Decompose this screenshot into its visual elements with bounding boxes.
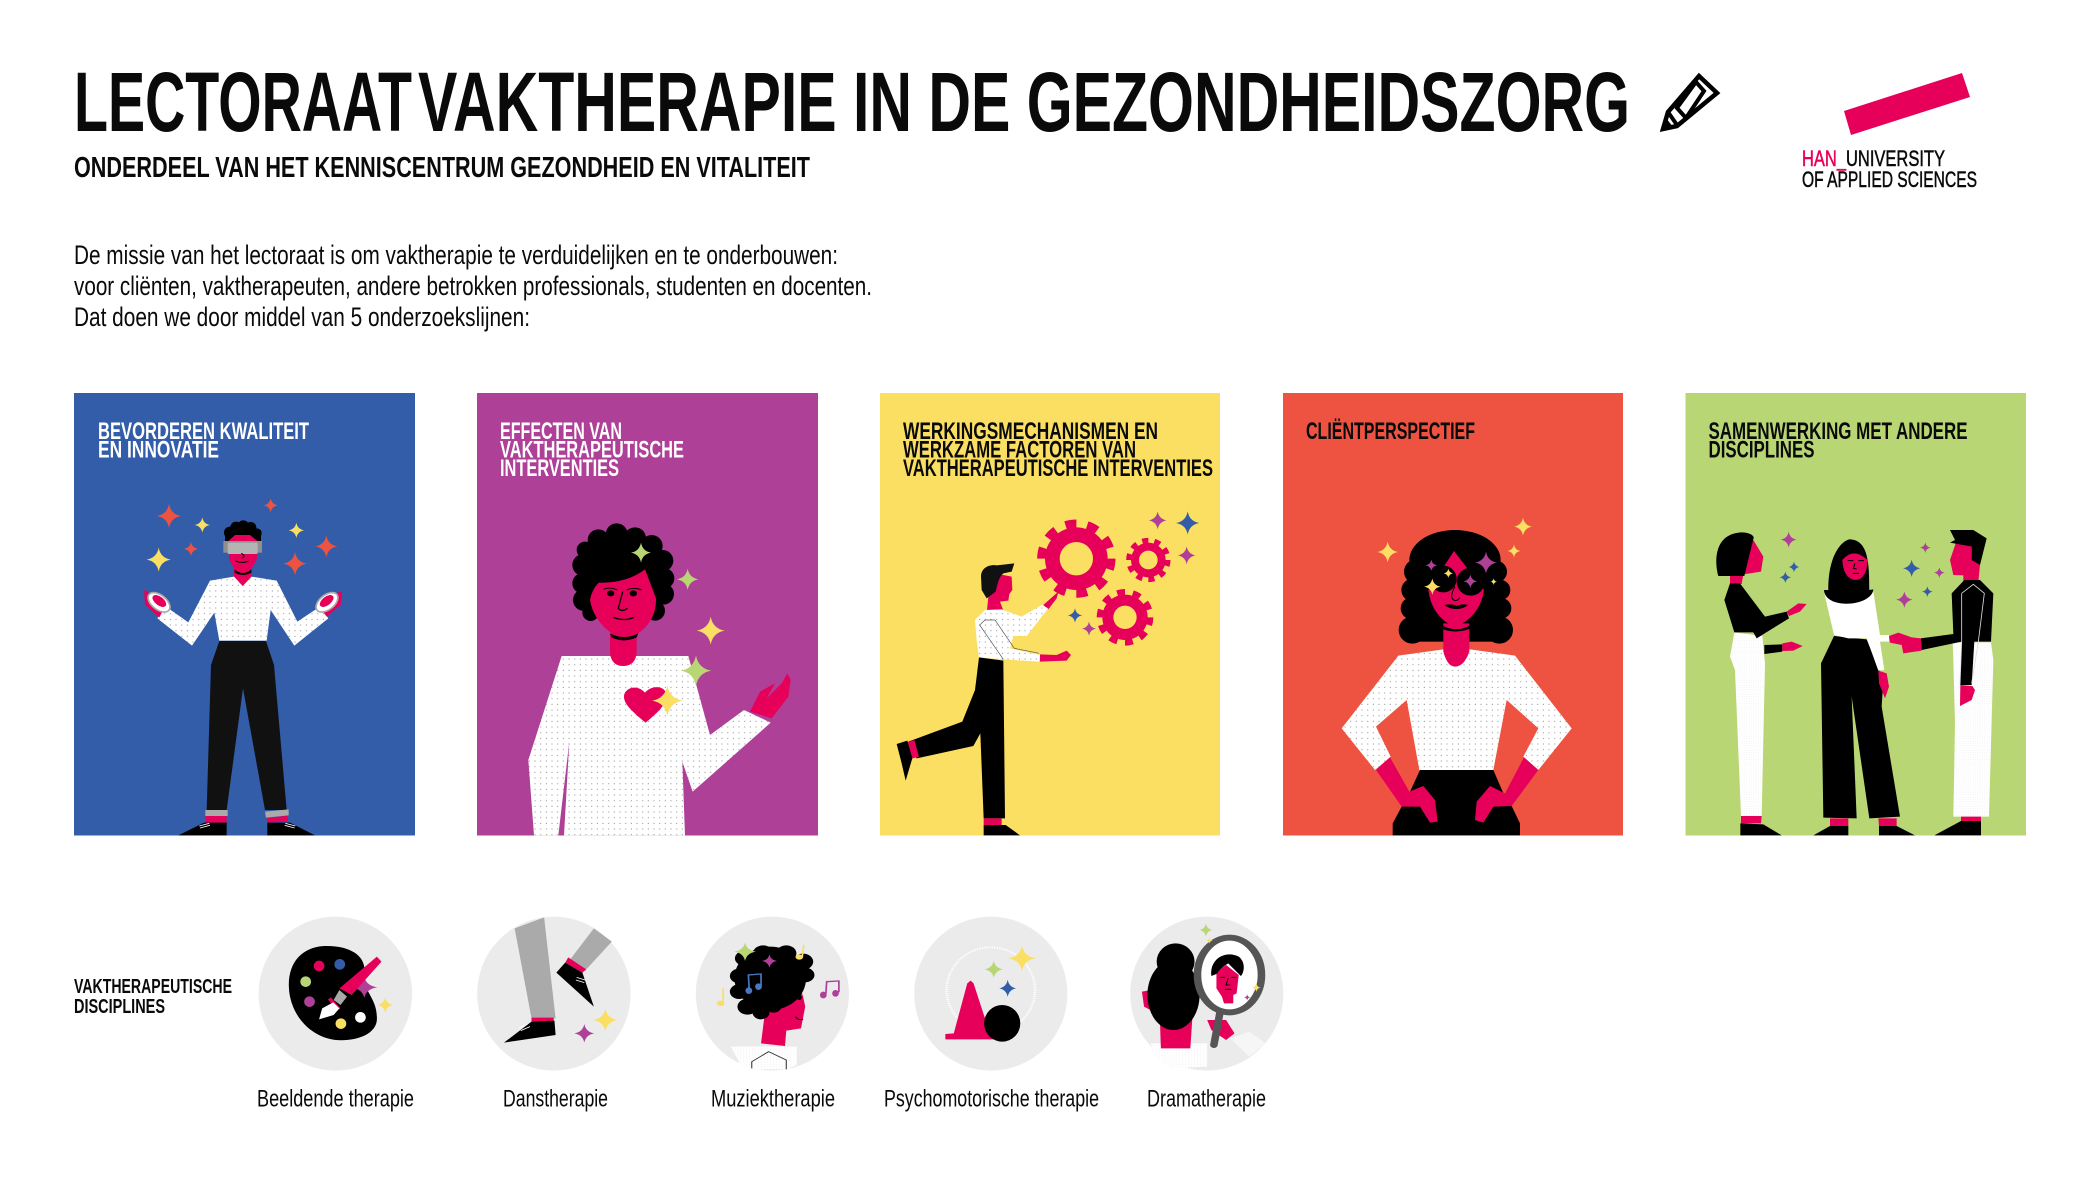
title: VAKTHERAPIE IN DE GEZONDHEIDSZORG: [418, 55, 1630, 149]
panel heading: DISCIPLINES: [1708, 436, 1814, 464]
panel heading: WERKZAME FACTOREN VAN: [903, 436, 1136, 464]
panel heading: BEVORDEREN KWALITEIT: [98, 418, 309, 445]
icon: danstherapie (legs): [477, 917, 631, 1071]
mission text: [74, 240, 872, 332]
panel heading: CLIËNTPERSPECTIEF: [1306, 418, 1475, 445]
disciplines label: [74, 976, 232, 1018]
subtitle: ONDERDEEL VAN HET KENNISCENTRUM GEZONDHEID EN VITALITEIT: [74, 152, 810, 184]
title: [74, 55, 1630, 149]
logo: HAN University of Applied Sciences: OF APPLIED SCIENCES: [1802, 167, 1977, 192]
panel heading: VAKTHERAPEUTISCHE INTERVENTIES: [903, 455, 1213, 482]
panel heading: VAKTHERAPEUTISCHE: [500, 436, 684, 464]
illustration: person with heart: [528, 523, 791, 835]
panel: werkingsmechanismen en werkzame factoren: [880, 393, 1220, 836]
icon: psychomotorische therapie (cone and ball): [914, 917, 1067, 1071]
icon: muziektherapie (head with notes): [696, 917, 849, 1071]
panel heading: WERKINGSMECHANISMEN EN: [903, 418, 1158, 445]
logo: HAN University of Applied Sciences: HAN_UNIVERSITY: [1802, 146, 1945, 171]
discipline captions: [257, 1086, 1266, 1112]
discipline captions: Muziektherapie: [711, 1086, 835, 1112]
panel heading: [1708, 418, 1968, 464]
illustration: person with VR headset: [144, 498, 342, 835]
panel heading: INTERVENTIES: [500, 455, 619, 482]
panel heading: [500, 418, 684, 482]
discipline captions: Beeldende therapie: [257, 1086, 414, 1112]
mission text: Dat doen we door middel van 5 onderzoekslijnen:: [74, 302, 530, 332]
panel: samenwerking met andere disciplines: [1686, 393, 2026, 836]
discipline captions: Danstherapie: [503, 1086, 608, 1112]
disciplines label: VAKTHERAPEUTISCHE: [74, 976, 232, 998]
discipline captions: Dramatherapie: [1147, 1086, 1266, 1112]
mission text: voor cliënten, vaktherapeuten, andere betrokken professionals, studenten en docenten.: [74, 271, 872, 301]
icon: beeldende therapie (palette): [259, 917, 412, 1071]
icon: dramatherapie (mirror): [1130, 917, 1283, 1071]
illustration: woman with sunglasses: [1342, 518, 1572, 835]
panel heading: [98, 418, 309, 464]
title: LECTORAAT: [74, 55, 412, 149]
panel heading: SAMENWERKING MET ANDERE: [1708, 418, 1968, 445]
illustration: person with gears: [897, 511, 1199, 835]
disciplines label: DISCIPLINES: [74, 996, 165, 1018]
panel heading: EFFECTEN VAN: [500, 418, 622, 445]
panel: bevorderen kwaliteit en innovatie: [74, 393, 415, 836]
panel heading: EN INNOVATIE: [98, 436, 219, 464]
mission text: De missie van het lectoraat is om vaktherapie te verduidelijken en te onderbouwen:: [74, 240, 838, 270]
icon: pencil: [1662, 76, 1717, 130]
panel: cliëntperspectief: [1283, 393, 1623, 836]
panel heading: [903, 418, 1213, 482]
logo: HAN University of Applied Sciences: [1802, 73, 1977, 192]
panel: effecten van vaktherapeutische interventies: [477, 393, 818, 836]
discipline captions: Psychomotorische therapie: [884, 1086, 1099, 1112]
illustration: three people collaborating: [1716, 530, 1993, 835]
